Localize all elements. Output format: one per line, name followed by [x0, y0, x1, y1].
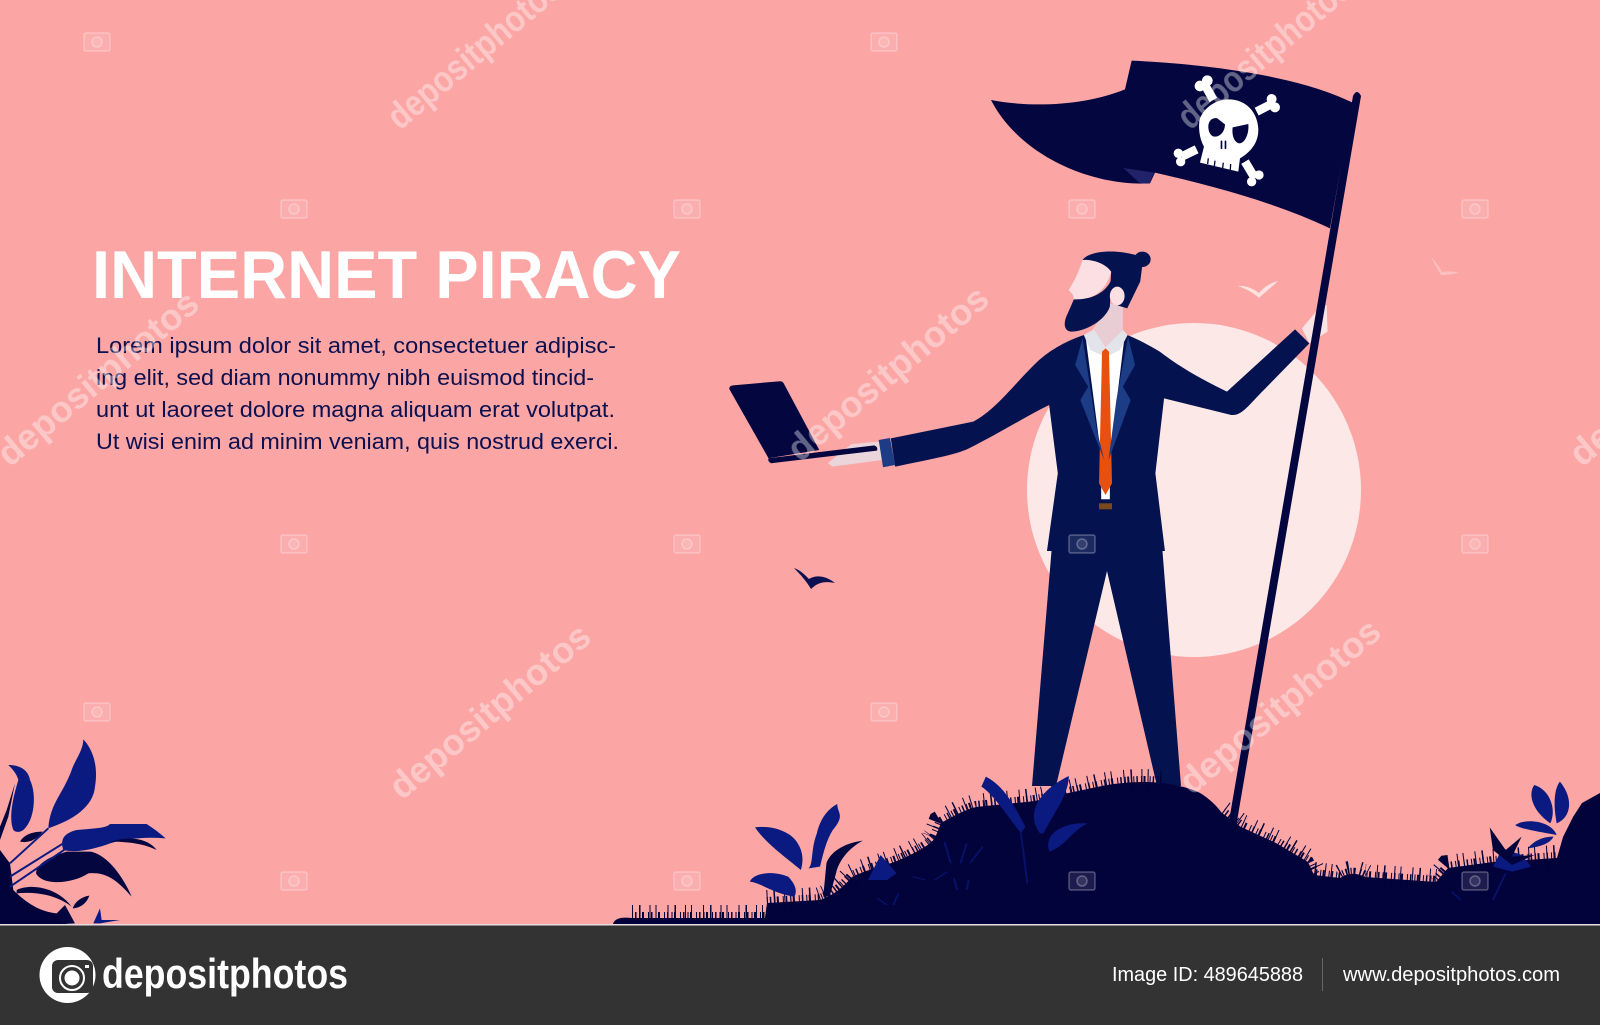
tie — [1099, 348, 1112, 495]
body text block — [96, 333, 619, 454]
website: www.depositphotos.com — [1342, 964, 1560, 986]
body text block: ing elit, sed diam nonummy nibh euismod tincid- — [96, 365, 594, 390]
flag fold — [1123, 168, 1154, 183]
flag with pole — [991, 61, 1361, 827]
lapels — [1075, 337, 1135, 460]
body text block: unt ut laoreet dolore magna aliquam erat volutpat. — [96, 397, 615, 422]
flag pole — [1228, 92, 1361, 827]
watermark camera icons — [84, 33, 1488, 890]
body text block: Lorem ipsum dolor sit amet, consectetuer adipisc- — [96, 333, 616, 358]
jacket and arms — [891, 329, 1309, 551]
hair — [1083, 251, 1142, 308]
body text block: Ut wisi enim ad minim veniam, quis nostrud exerci. — [96, 429, 619, 454]
right hand — [1302, 305, 1328, 343]
grass fringe tall — [632, 782, 1557, 918]
beard — [1065, 280, 1111, 332]
icon: faint bird right — [1431, 257, 1459, 275]
footer logo icon — [40, 947, 96, 1003]
title: INTERNET PIRACY — [92, 237, 681, 313]
footer bar — [0, 924, 1600, 1025]
belt — [1099, 503, 1112, 509]
legs — [1032, 545, 1181, 786]
neck — [1092, 303, 1123, 348]
laptop — [729, 381, 877, 463]
ear — [1110, 287, 1125, 305]
sun disc — [1027, 323, 1361, 657]
grass fringe short — [632, 782, 1557, 918]
hill body — [613, 782, 1600, 924]
watermarks: depositphotos — [381, 615, 599, 807]
shirt — [1086, 340, 1124, 499]
skull and crossbones — [1174, 75, 1280, 186]
footer logo wordmark: depositphotos — [102, 950, 348, 997]
cuff — [879, 438, 895, 467]
plants on hill — [750, 776, 1569, 905]
flag cloth — [991, 61, 1353, 228]
mound — [0, 850, 67, 924]
collar — [1084, 329, 1128, 355]
left hand — [828, 442, 882, 467]
hair bun — [1134, 252, 1151, 267]
left corner plant — [0, 739, 166, 924]
watermarks: depositphotos — [779, 277, 997, 469]
hill with grass — [613, 782, 1600, 924]
watermarks — [0, 0, 1600, 807]
icon: dark bird — [794, 568, 835, 589]
icon: light bird near man — [1238, 281, 1278, 298]
man with laptop — [729, 251, 1328, 786]
face — [1069, 260, 1111, 301]
watermarks: depositphotos — [1171, 610, 1389, 802]
image id: Image ID: 489645888 — [1112, 964, 1303, 986]
